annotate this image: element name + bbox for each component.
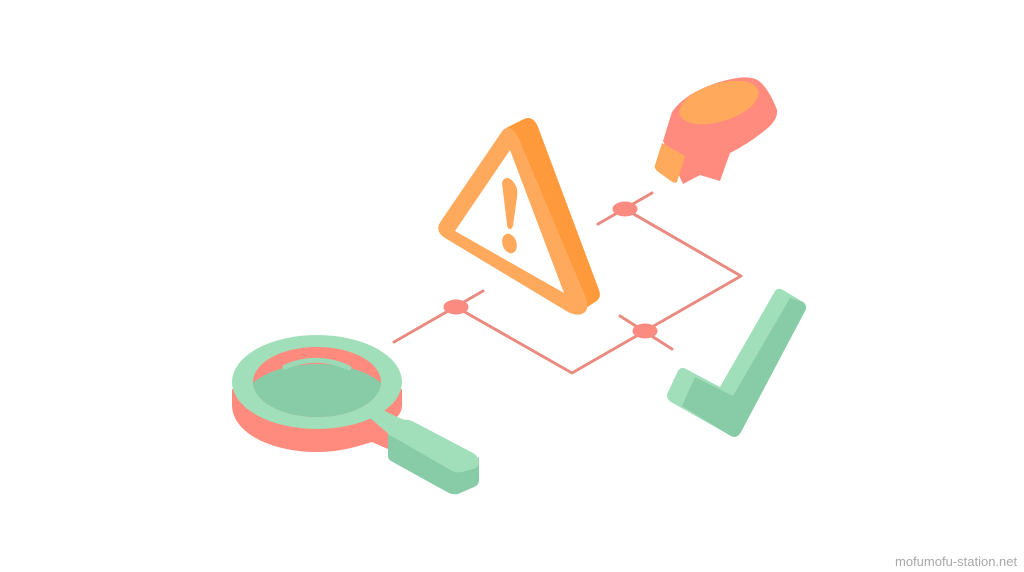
icon: check mark <box>667 289 806 437</box>
lens glass <box>253 364 381 417</box>
check dark face <box>682 298 806 437</box>
handle side <box>388 434 479 494</box>
node: left <box>444 300 468 314</box>
lens highlight <box>285 360 349 368</box>
exclamation mark dot <box>500 232 519 255</box>
bulb body <box>663 77 777 184</box>
network lines and nodes <box>394 193 741 373</box>
exclamation mark bar <box>502 178 517 229</box>
connector path: upper route <box>625 209 741 331</box>
triangle front frame <box>438 128 587 315</box>
connector path: left branch <box>394 291 483 342</box>
node: lower right <box>632 324 658 338</box>
connector path: centre route <box>456 307 645 373</box>
triangle side face <box>506 118 600 314</box>
check light face <box>667 289 806 437</box>
lens hole <box>253 347 381 417</box>
icon: magnifying glass <box>232 335 479 494</box>
watermark text: mofumofu-station.net <box>895 554 1018 569</box>
bulb base <box>655 143 685 183</box>
node: top <box>612 202 638 216</box>
connector path: right branch <box>620 316 672 349</box>
icon: warning triangle <box>438 118 600 315</box>
icon: light bulb <box>655 72 777 184</box>
handle neck <box>370 410 408 435</box>
lens body depth <box>232 389 402 452</box>
connector path: top branch <box>598 193 652 224</box>
lens ring <box>232 335 402 429</box>
bulb top ellipse <box>674 72 764 133</box>
handle top <box>388 420 479 472</box>
